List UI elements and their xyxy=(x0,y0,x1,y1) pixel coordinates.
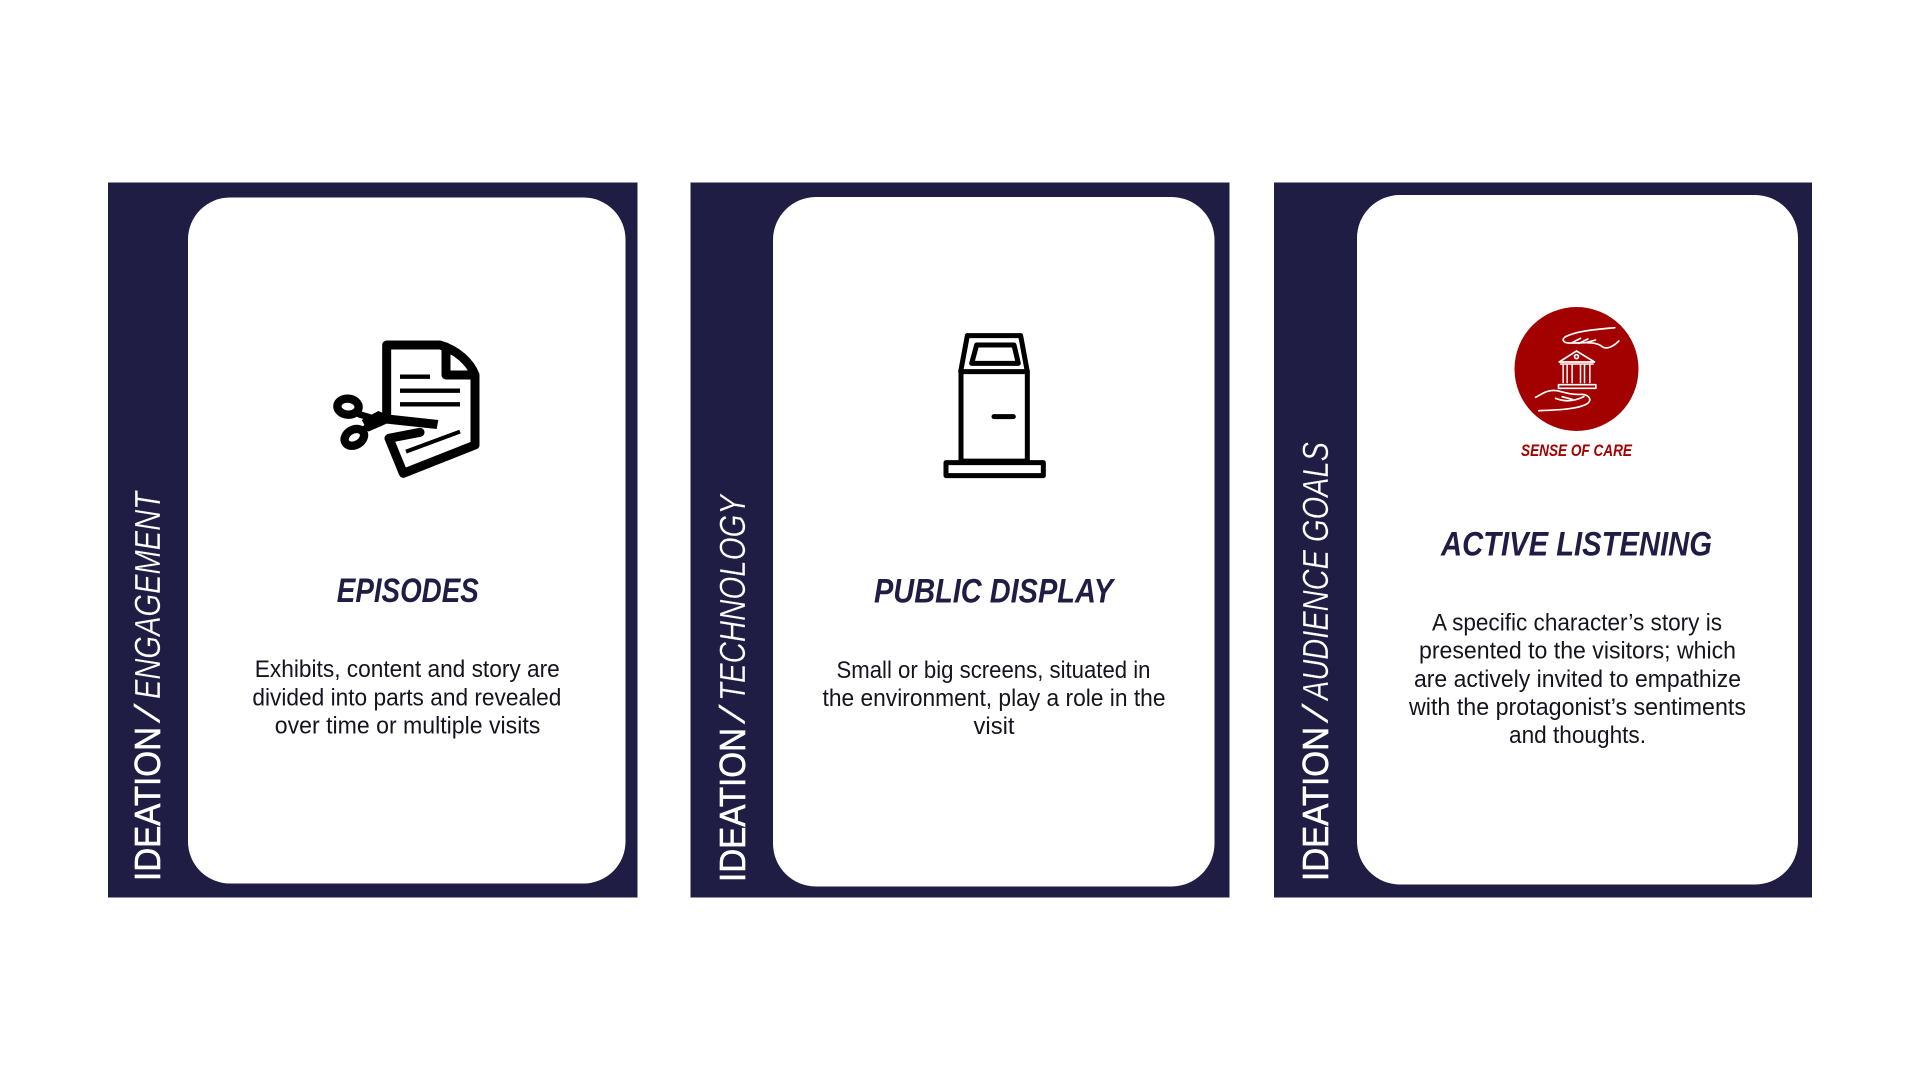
side label: ideation / engagement: / xyxy=(127,701,168,725)
icon: scissors cutting a document xyxy=(337,345,475,473)
card face: active listening xyxy=(1357,195,1798,884)
description: public display: visit xyxy=(974,713,1015,740)
description: episodes: Exhibits, content and story are xyxy=(255,656,560,683)
side label: ideation / technology: IDEATION xyxy=(712,728,753,882)
description: public display: Small or big screens, situated in xyxy=(836,657,1150,684)
description: active listening: and thoughts. xyxy=(1509,722,1646,749)
panel: episodes card xyxy=(108,182,638,898)
badge label: sense of care: SENSE OF CARE xyxy=(1521,442,1633,460)
panel: public display card xyxy=(690,182,1230,898)
side label: ideation / engagement xyxy=(127,490,168,881)
side label: ideation / audience goals: IDEATION xyxy=(1295,727,1336,881)
description: public display: the environment, play a role in the xyxy=(822,685,1166,712)
heading: public display: PUBLIC DISPLAY xyxy=(874,572,1116,610)
panel: active listening card xyxy=(1274,182,1812,898)
description: episodes xyxy=(252,656,561,740)
description: public display xyxy=(822,657,1166,740)
side label: ideation / engagement: IDEATION xyxy=(127,727,168,881)
description: active listening: with the protagonist’s sentiments xyxy=(1408,694,1746,721)
card face: episodes xyxy=(188,198,626,884)
description: active listening: presented to the visitors; which xyxy=(1419,638,1736,664)
description: active listening: A specific character’s story is xyxy=(1432,610,1722,636)
icon: sense of care badge xyxy=(1514,307,1638,431)
side label: ideation / audience goals xyxy=(1295,442,1336,881)
side label: ideation / technology xyxy=(712,493,753,882)
icon: public display kiosk xyxy=(946,336,1043,476)
side label: ideation / engagement: ENGAGEMENT xyxy=(127,490,168,699)
description: episodes: divided into parts and revealed xyxy=(252,684,561,712)
side label: ideation / audience goals: AUDIENCE GOALS xyxy=(1295,442,1336,702)
card face: public display xyxy=(773,197,1214,886)
heading: episodes: EPISODES xyxy=(337,572,479,610)
side label: ideation / audience goals: / xyxy=(1295,701,1336,725)
side label: ideation / technology: TECHNOLOGY xyxy=(712,493,753,701)
description: episodes: over time or multiple visits xyxy=(275,712,540,740)
heading: active listening: ACTIVE LISTENING xyxy=(1440,526,1712,564)
description: active listening xyxy=(1408,610,1746,749)
description: active listening: are actively invited to empathize xyxy=(1414,666,1741,693)
side label: ideation / technology: / xyxy=(712,702,753,726)
